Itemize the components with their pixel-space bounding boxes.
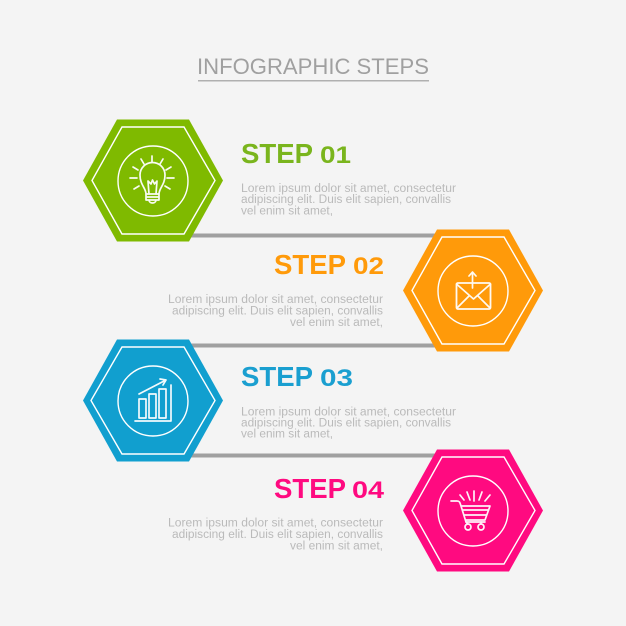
text block: step 02: adipiscing elit. Duis elit sapien, convallis (172, 306, 383, 318)
heading: step 04: STEP (274, 473, 346, 504)
text block: step 04: adipiscing elit. Duis elit sapien, convallis (172, 529, 383, 541)
heading: step 01: 01 (320, 142, 351, 169)
text block: step 04 (168, 518, 383, 552)
connector 1 (188, 234, 438, 238)
panel: step 01 (83, 120, 456, 242)
text block: step 03 (241, 406, 456, 440)
icon circle: step 03 (118, 366, 188, 436)
icon circle: step 04 (438, 476, 508, 546)
heading: step 01: STEP (241, 138, 313, 169)
connector 3 (188, 454, 438, 458)
hexagon: step 02 (403, 230, 543, 352)
hexagon: step 04 (403, 450, 543, 572)
hexagon outline: step 04 (412, 457, 535, 564)
text block: step 04: Lorem ipsum dolor sit amet, consectetur (168, 518, 383, 530)
heading: step 02: 02 (353, 253, 384, 280)
panel: step 04 (168, 450, 543, 572)
heading: step 03 (241, 361, 353, 392)
hexagon: step 03 (83, 340, 223, 462)
heading: step 03: STEP (241, 361, 313, 392)
icon circle: step 02 (438, 256, 508, 326)
panel: step 03 (83, 340, 456, 462)
icon: shopping cart (451, 491, 490, 530)
heading: step 02: STEP (274, 249, 346, 280)
text block: step 03: Lorem ipsum dolor sit amet, consectetur (241, 406, 456, 418)
text block: step 01: adipiscing elit. Duis elit sapien, convallis (241, 194, 451, 206)
icon circle: step 01 (118, 146, 188, 216)
panel: step 02 (168, 230, 543, 352)
text block: step 03: adipiscing elit. Duis elit sapien, convallis (241, 418, 451, 430)
icon: bar chart (135, 379, 171, 421)
text block: step 02: Lorem ipsum dolor sit amet, consectetur (168, 294, 383, 306)
icon: light bulb (130, 156, 174, 203)
heading: step 01 (241, 138, 351, 169)
hexagon outline: step 01 (92, 127, 215, 234)
heading: step 04 (274, 473, 385, 504)
text block: step 01: Lorem ipsum dolor sit amet, consectetur (241, 183, 456, 195)
hexagon outline: step 03 (91, 347, 215, 454)
heading: step 02 (274, 249, 384, 280)
title: INFOGRAPHIC STEPS (197, 54, 429, 79)
connector 2 (188, 344, 438, 348)
hexagon outline: step 02 (412, 237, 535, 344)
icon: envelope with arrow (456, 272, 490, 309)
text block: step 01 (241, 183, 456, 218)
hexagon: step 01 (83, 120, 223, 242)
heading: step 03: 03 (320, 365, 353, 392)
text block: step 01: vel enim sit amet, (241, 206, 333, 218)
text block: step 04: vel enim sit amet, (290, 540, 383, 552)
text block: step 02 (168, 294, 383, 329)
text block: step 03: vel enim sit amet, (241, 428, 333, 440)
heading: step 04: 04 (352, 477, 385, 504)
text block: step 02: vel enim sit amet, (290, 317, 383, 329)
